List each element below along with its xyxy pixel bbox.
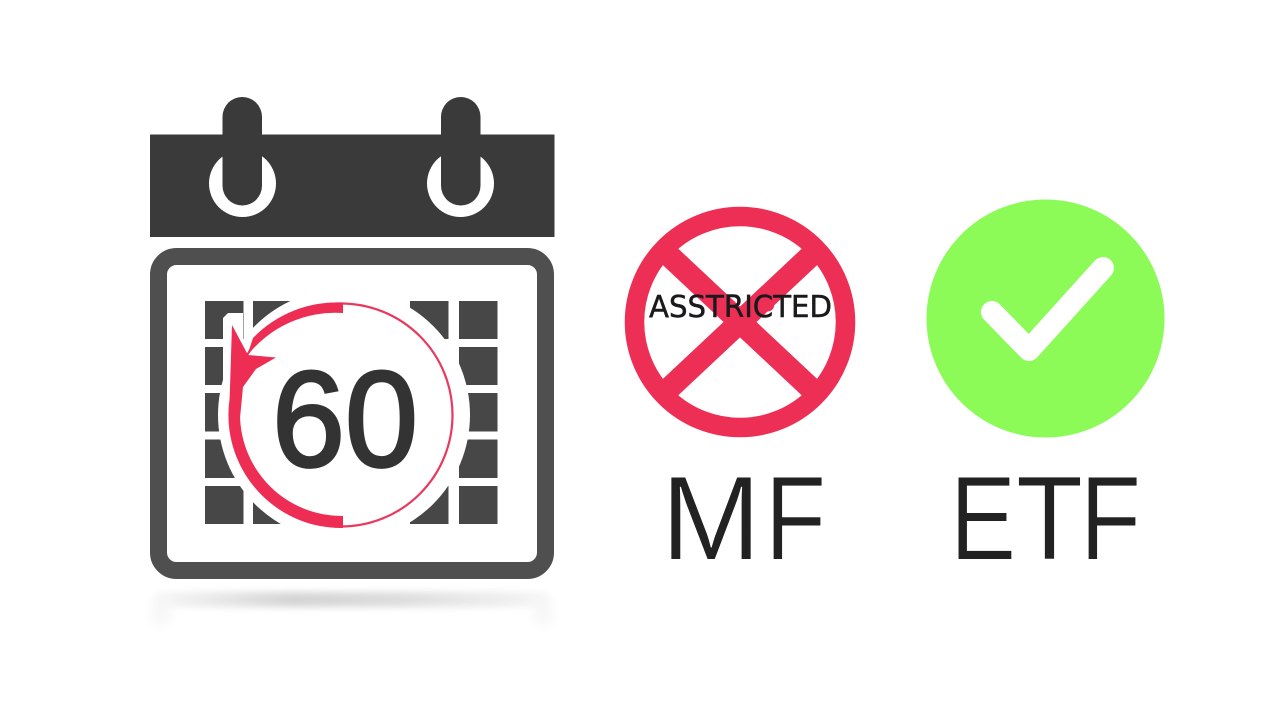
white badge behind countdown <box>218 289 470 541</box>
countdown arrow ring <box>229 302 452 528</box>
calendar shadow <box>153 592 551 624</box>
MF label: F <box>765 452 826 586</box>
ETF label <box>950 452 1141 586</box>
red prohibition circle and cross <box>634 216 846 428</box>
restricted icon <box>634 216 846 428</box>
calendar icon <box>150 97 554 624</box>
white check mark <box>992 268 1103 350</box>
calendar body frame <box>158 256 546 570</box>
calendar header bar <box>150 97 554 237</box>
calendar day grid <box>205 301 498 524</box>
approved icon <box>926 200 1164 438</box>
number 60: 60 <box>272 343 418 495</box>
MF label: M <box>661 452 761 586</box>
ETF label: T <box>1016 452 1083 586</box>
ETF label: F <box>1080 452 1141 586</box>
green circle <box>926 200 1164 438</box>
restricted label: ASSTRICTED <box>649 290 832 325</box>
MF label <box>661 452 826 586</box>
ETF label: E <box>950 452 1016 586</box>
